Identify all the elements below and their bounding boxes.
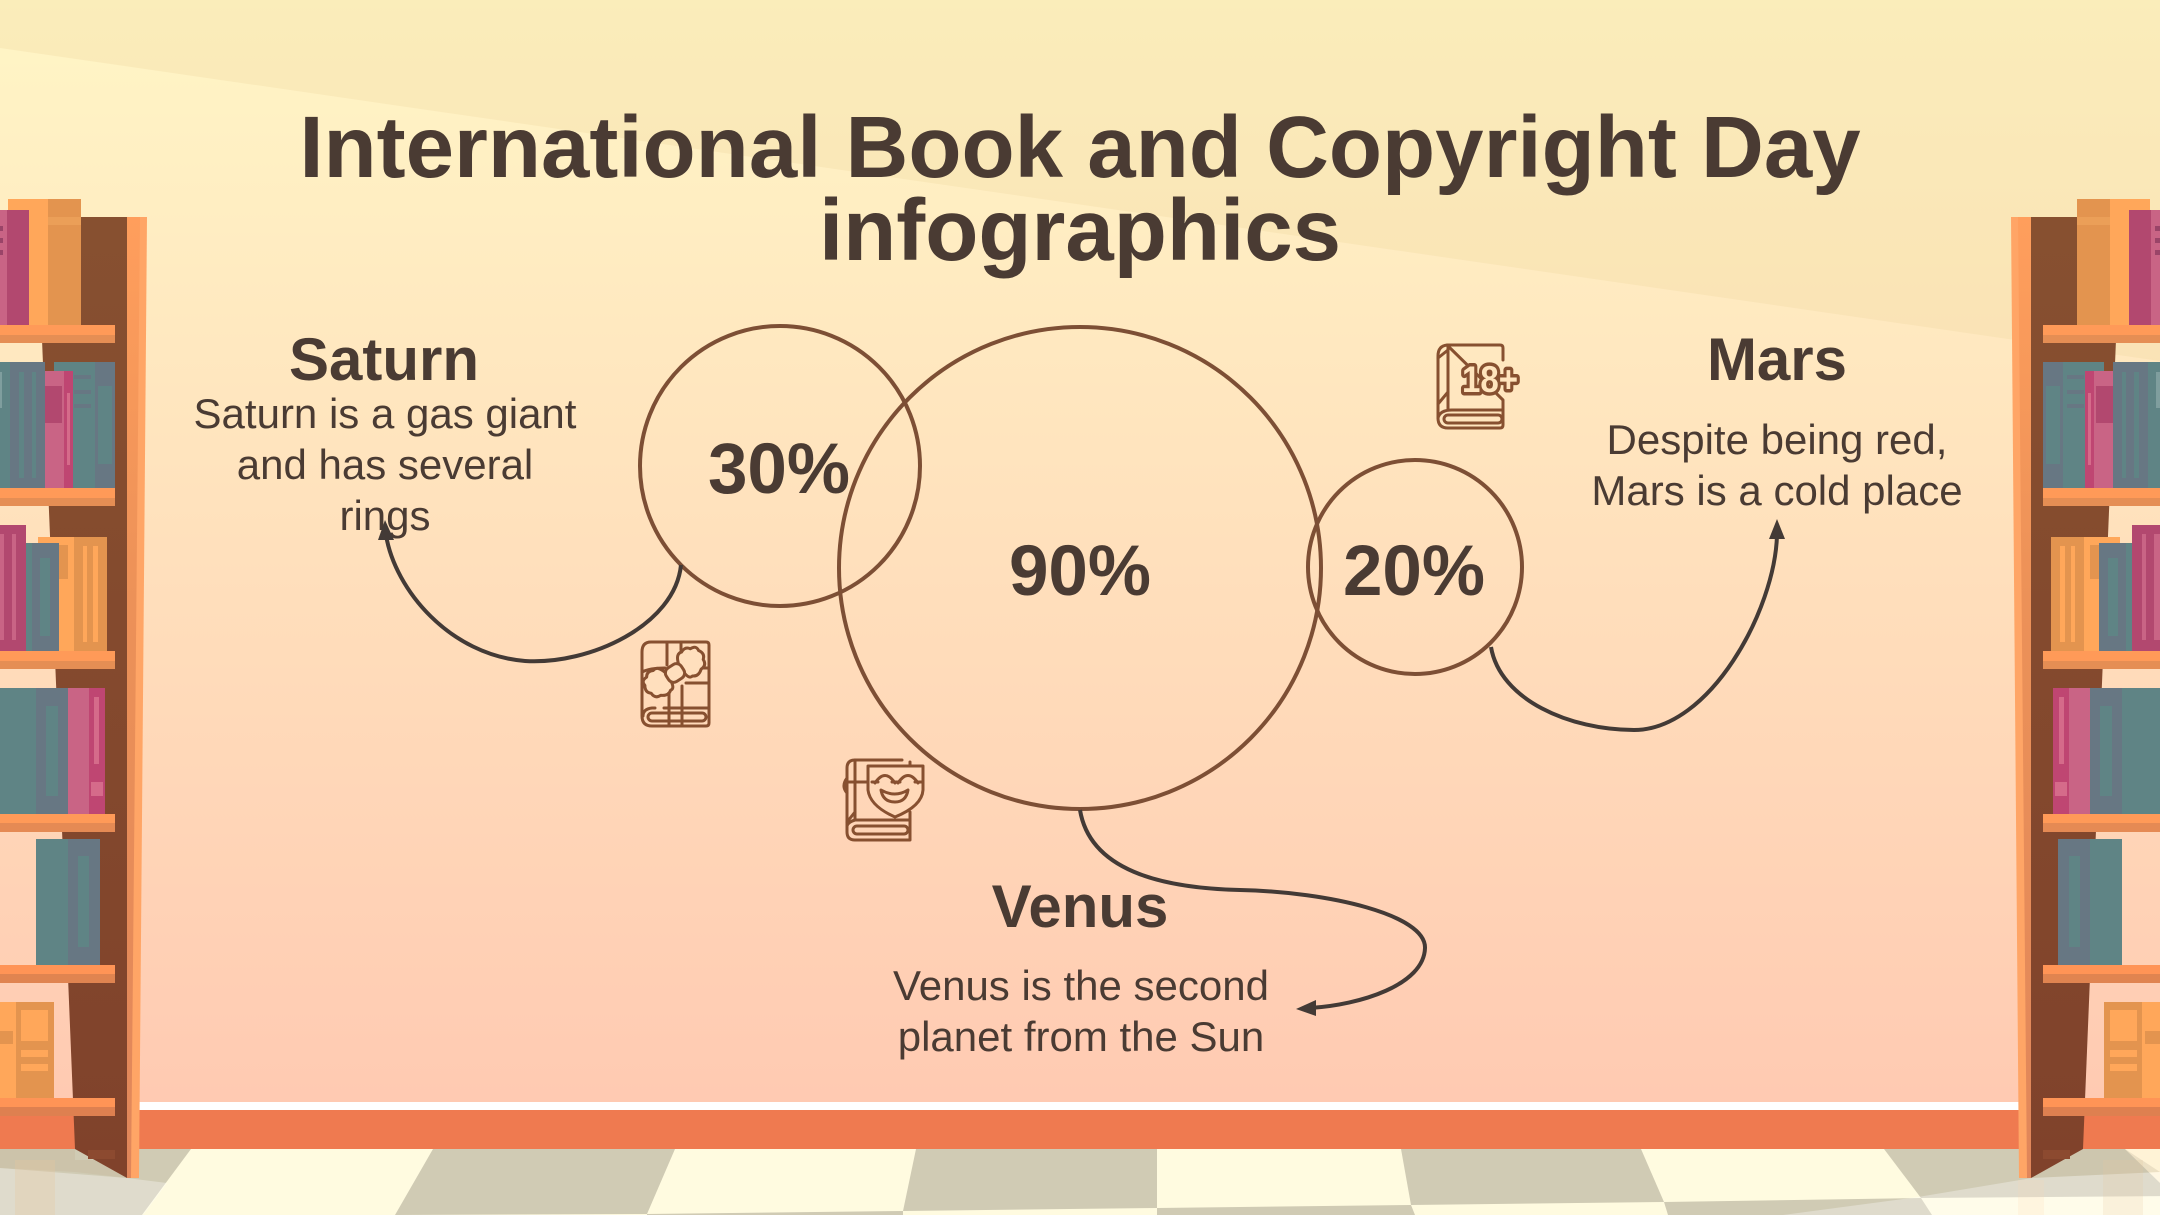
text block: Saturn: Saturn is a gas giant	[194, 390, 577, 437]
circle: Mars 20%	[1308, 460, 1522, 674]
text block: Venus: planet from the Sun	[898, 1013, 1264, 1060]
text block: Saturn: Saturn	[289, 326, 479, 393]
text block: Mars: Mars	[1707, 326, 1847, 393]
title	[299, 99, 1861, 279]
bookshelf left	[0, 199, 147, 1178]
text block: Saturn: and has several	[237, 441, 533, 488]
arrow: Saturn	[378, 520, 681, 661]
circle: Saturn 30%: 30%	[708, 430, 850, 509]
circle: Venus 90%	[839, 327, 1321, 809]
title: infographics	[819, 182, 1341, 279]
title: International Book and Copyright Day	[299, 99, 1861, 196]
text block: Saturn	[194, 326, 577, 539]
baseboard	[0, 1102, 2160, 1149]
text block: Mars: Despite being red,	[1607, 416, 1947, 463]
circle: Saturn 30%	[640, 326, 920, 606]
text block: Venus: Venus is the second	[893, 962, 1269, 1009]
icon: 18+ book	[1438, 345, 1518, 428]
text block: Mars	[1591, 326, 1963, 514]
text block: Venus: Venus	[992, 873, 1168, 940]
circle: Mars 20%: 20%	[1343, 532, 1485, 611]
bookshelf right	[2011, 199, 2160, 1178]
text block: Mars: Mars is a cold place	[1591, 467, 1963, 514]
arrow: Mars	[1491, 519, 1785, 730]
icon: gift book	[638, 642, 711, 726]
icon: 18+ book: 18+	[1462, 359, 1518, 400]
text block: Venus	[893, 873, 1269, 1060]
arrow: Venus	[1080, 810, 1425, 1016]
icon: theatre mask book	[844, 760, 923, 840]
checkered floor	[0, 1149, 2160, 1215]
text block: Saturn: rings	[339, 492, 431, 539]
circle: Venus 90%: 90%	[1009, 532, 1151, 611]
